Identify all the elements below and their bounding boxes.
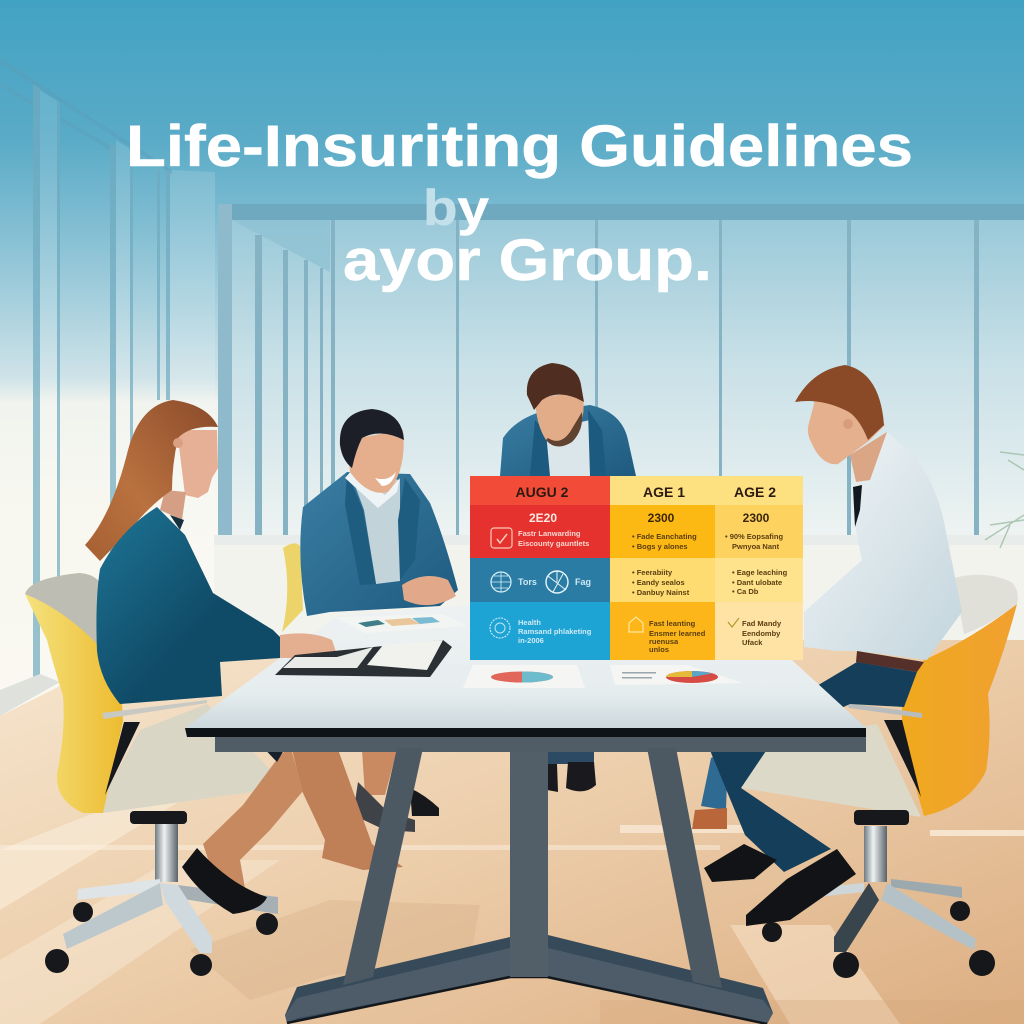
person: woman torso and head [85, 400, 336, 704]
header row: AGE 2 [734, 484, 776, 500]
table legs and base [285, 748, 773, 1024]
person: right man torso and head [795, 365, 962, 672]
table [185, 605, 866, 1024]
icon: plant [985, 452, 1024, 548]
chair: left chair [25, 573, 287, 976]
column: red and blue: Health [518, 618, 541, 627]
column: age 1: • Feerabiity [632, 568, 673, 577]
column: age 1: ruenusa [649, 637, 679, 646]
column: age 1: 2300 [648, 511, 675, 525]
column: red and blue [470, 505, 610, 660]
person: man at back [500, 363, 636, 792]
column: red and blue: Fastr Lanwarding [518, 529, 581, 538]
back window wall [214, 204, 1024, 640]
column: age 2: Ufack [742, 638, 763, 647]
column: age 2: • Ca Db [732, 587, 759, 596]
column: age 1: • Danbuy Nainst [632, 588, 690, 597]
column: age 1 [610, 505, 715, 660]
person: middle man [300, 409, 458, 832]
column: red and blue: Fag [575, 577, 591, 587]
left window wall [0, 58, 215, 716]
column: age 1: • Bogs y alones [632, 542, 688, 551]
column: age 2: • Dant ulobate [732, 578, 782, 587]
column: age 2 [715, 505, 803, 660]
column: age 2: Pwnyoa Nant [732, 542, 780, 551]
column: age 1: unlos [649, 645, 669, 654]
title: Life-Insuriting Guidelines [126, 114, 913, 179]
header row: AUGU 2 [516, 484, 569, 500]
column: age 2: Fad Mandy [742, 619, 782, 628]
paper: pie chart report right [610, 665, 743, 685]
chair: yellow chair behind middle man [282, 543, 303, 632]
column: red and blue: in-2006 [518, 636, 544, 645]
column: age 2: Eendomby [742, 629, 781, 638]
title [126, 114, 913, 293]
column: age 1: • Eandy sealos [632, 578, 685, 587]
column: age 1: • Fade Eanchating [632, 532, 697, 541]
chart: comparison table [470, 476, 803, 660]
title: ayor Group. [343, 228, 712, 293]
paper: document on far table side [335, 614, 467, 633]
column: red and blue: Eiscounty gauntlets [518, 539, 589, 548]
header row: AGE 1 [643, 484, 685, 500]
person: right man legs and shoes [692, 662, 917, 926]
book: open folder [275, 640, 452, 677]
column: red and blue: Ramsand phlaketing [518, 627, 592, 636]
column: age 1: Ensmer learned [649, 629, 706, 638]
column: red and blue: Tors [518, 577, 537, 587]
header row [470, 476, 803, 505]
column: age 2: • 90% Eopsafing [725, 532, 783, 541]
column: age 1: Fast leanting [649, 619, 696, 628]
title: by [423, 180, 489, 236]
floor [0, 640, 1024, 1024]
column: red and blue: 2E20 [529, 511, 557, 525]
column: age 2: 2300 [743, 511, 770, 525]
chair: right chair [741, 575, 1018, 978]
person: woman legs and shoe [182, 737, 403, 914]
paper: pie chart report left [463, 665, 585, 688]
column: age 2: • Eage leaching [732, 568, 788, 577]
